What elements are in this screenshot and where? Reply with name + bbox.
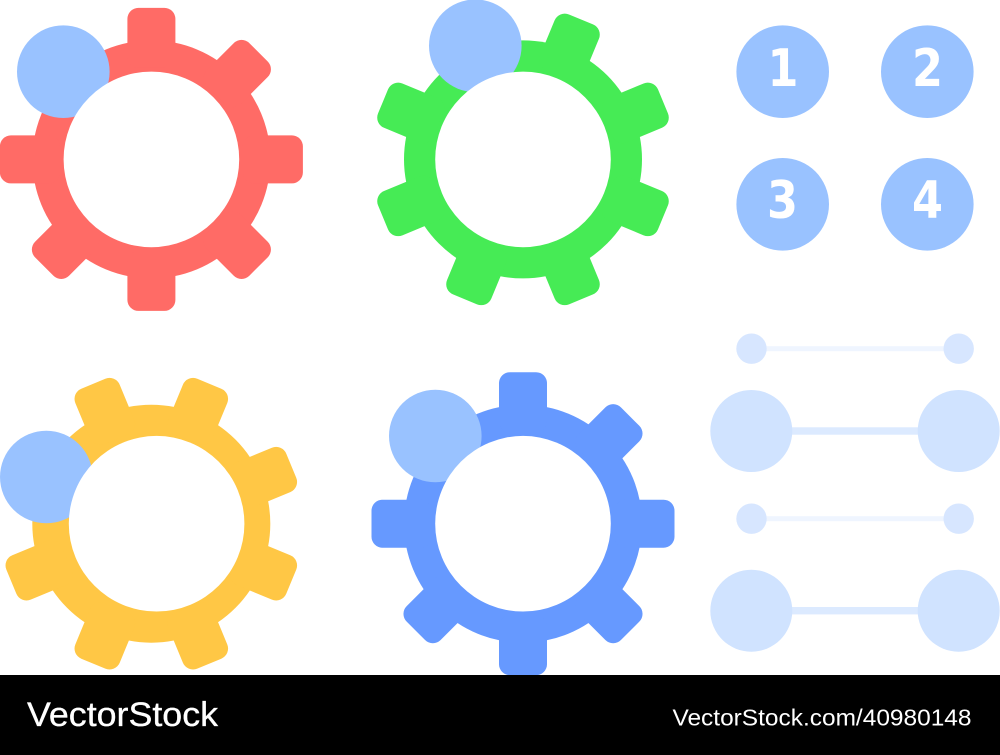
footer brand name: VectorStock — [27, 696, 219, 734]
connector: large row 2 — [710, 390, 1000, 472]
badge 1: 1 — [768, 39, 798, 99]
yellow gear body with teeth — [2, 375, 300, 673]
yellow gear centre hole — [69, 436, 244, 612]
red gear centre hole — [64, 72, 239, 247]
red gear body with teeth — [0, 8, 303, 311]
green gear body with teeth — [374, 10, 672, 309]
badge 4: 4 — [912, 171, 943, 231]
badge 3: 3 — [767, 171, 798, 231]
footer band — [0, 675, 1000, 755]
yellow gear blue marker circle — [0, 431, 93, 523]
badge 1 — [736, 25, 829, 118]
numbered badges — [736, 25, 974, 251]
gear: red — [0, 8, 303, 311]
gear: green — [374, 0, 672, 309]
connector: small row 3 — [736, 504, 974, 534]
gear: blue — [372, 372, 674, 675]
connector: small row 1 — [736, 334, 974, 364]
footer image id: VectorStock.com/40980148 — [672, 705, 972, 731]
badge 2: 2 — [912, 39, 943, 99]
red gear blue marker circle — [17, 25, 110, 118]
badge 4 — [881, 158, 974, 251]
green gear blue marker circle — [429, 0, 522, 92]
connector: large row 4 — [710, 570, 1000, 652]
blue gear marker circle — [389, 390, 482, 482]
badge 2 — [881, 25, 974, 118]
green gear centre hole — [435, 72, 611, 247]
badge 3 — [736, 158, 829, 251]
blue gear centre hole — [435, 436, 611, 612]
gear: yellow — [0, 375, 300, 673]
blue gear body with teeth — [372, 372, 674, 675]
